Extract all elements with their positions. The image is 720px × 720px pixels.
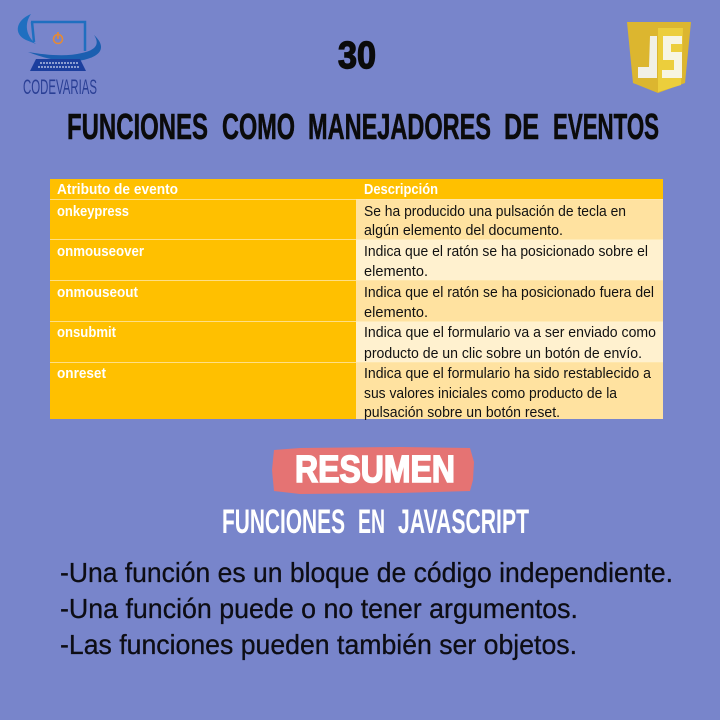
icon: Codevarias logo <box>18 14 101 99</box>
descriptions: elemento. <box>364 305 428 321</box>
table header: Descripción <box>364 182 438 198</box>
table header: Atributo de evento <box>57 182 178 198</box>
logo wordmark: CODEVARIAS <box>23 76 97 99</box>
subtitle <box>222 503 529 541</box>
attribute names: onmouseout <box>57 285 138 301</box>
descriptions: Indica que el formulario va a ser enviado como <box>364 325 656 341</box>
descriptions: algún elemento del documento. <box>364 223 563 239</box>
title: COMO <box>222 106 295 147</box>
descriptions: Se ha producido una pulsación de tecla en <box>364 204 626 220</box>
descriptions <box>364 204 656 421</box>
descriptions: producto de un clic sobre un botón de envío. <box>364 346 642 362</box>
summary text: -Una función es un bloque de código independiente. <box>60 557 673 588</box>
icon: JavaScript shield <box>627 22 691 93</box>
descriptions: Indica que el formulario ha sido restablecido a <box>364 366 652 382</box>
subtitle: FUNCIONES <box>222 503 345 541</box>
descriptions: sus valores iniciales como producto de la <box>364 386 618 402</box>
badge: resumen: RESUMEN <box>295 449 455 491</box>
subtitle: JAVASCRIPT <box>398 503 529 541</box>
descriptions: pulsación sobre un botón reset. <box>364 405 560 421</box>
title: MANEJADORES <box>308 106 491 147</box>
descriptions: Indica que el ratón se ha posicionado sobre el <box>364 244 648 260</box>
title <box>67 106 659 147</box>
attribute names: onreset <box>57 366 106 382</box>
attribute names: onmouseover <box>57 244 144 260</box>
attribute names <box>57 204 144 382</box>
attribute names: onkeypress <box>57 204 129 220</box>
table: event attributes <box>50 179 663 421</box>
attribute names: onsubmit <box>57 325 116 341</box>
title: EVENTOS <box>553 106 659 147</box>
summary text: -Las funciones pueden también ser objetos. <box>60 629 577 660</box>
descriptions: Indica que el ratón se ha posicionado fuera del <box>364 285 654 301</box>
summary text <box>60 557 673 660</box>
table header <box>57 182 438 198</box>
title: FUNCIONES <box>67 106 208 147</box>
page number: 30 <box>338 35 376 77</box>
description cell backgrounds <box>356 199 663 419</box>
summary text: -Una función puede o no tener argumentos. <box>60 593 578 624</box>
subtitle: EN <box>358 503 385 541</box>
descriptions: elemento. <box>364 264 428 280</box>
title: DE <box>504 106 539 147</box>
